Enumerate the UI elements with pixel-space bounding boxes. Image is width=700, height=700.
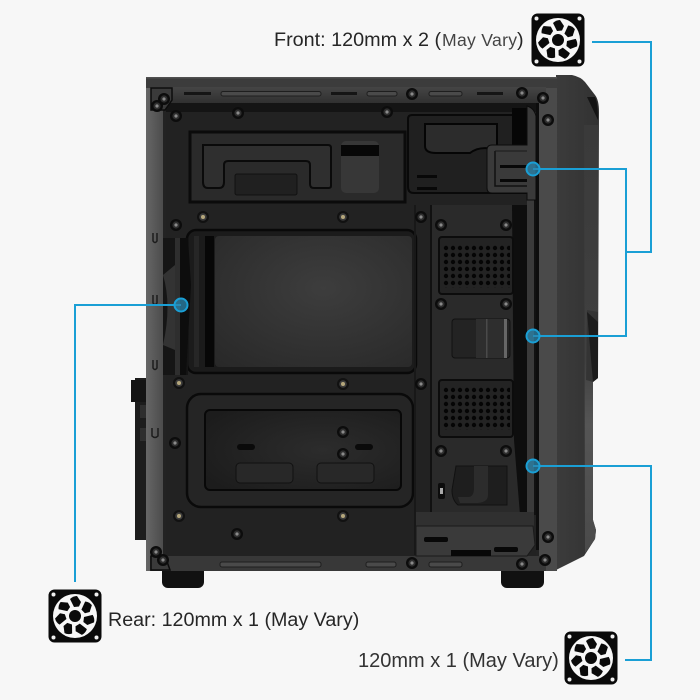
rear expansion brackets: [131, 378, 146, 540]
right frame: [539, 88, 557, 571]
label: front fan: ): [517, 29, 524, 51]
left frame clips: [152, 233, 158, 438]
icon: front fan: [532, 14, 584, 66]
vent panel upper: [439, 237, 513, 294]
computer case: open side view: [131, 75, 599, 588]
top rail: [146, 77, 557, 88]
front panel: [554, 75, 599, 571]
feet: [162, 565, 544, 588]
label: bottom fan: 120mm x 1 (May Vary): [358, 650, 559, 672]
drive cage bracket: [487, 106, 536, 200]
low recess: [452, 466, 507, 505]
central recess: [187, 230, 416, 373]
mid recess: [452, 319, 510, 358]
label: front fan: Front: 120mm x 2 (: [274, 29, 441, 51]
PSU shroud: [416, 512, 535, 556]
marker: front fan upper: [526, 162, 540, 176]
case body: [146, 77, 557, 571]
vent panel lower: [439, 380, 513, 437]
upper recess: [190, 132, 405, 202]
icon: bottom fan: [564, 632, 618, 684]
marker: rear fan: [174, 298, 188, 312]
left frame: [146, 88, 163, 571]
label: rear fan: Rear: 120mm x 1 (May Vary): [108, 609, 359, 631]
screws: [150, 87, 554, 570]
icon: rear fan: [48, 590, 102, 642]
drive bay area: [414, 190, 536, 555]
corner plates: [151, 88, 172, 570]
rear fan: [163, 238, 191, 375]
connector lines: [75, 42, 651, 660]
label: front fan: May Vary: [442, 30, 517, 50]
marker: bottom fan: [526, 460, 540, 472]
interior motherboard tray: [166, 103, 536, 556]
lower recess: [187, 394, 413, 507]
marker: front fan lower: [526, 330, 540, 342]
bottom rail: [150, 556, 546, 571]
top drive bay: [408, 108, 527, 193]
